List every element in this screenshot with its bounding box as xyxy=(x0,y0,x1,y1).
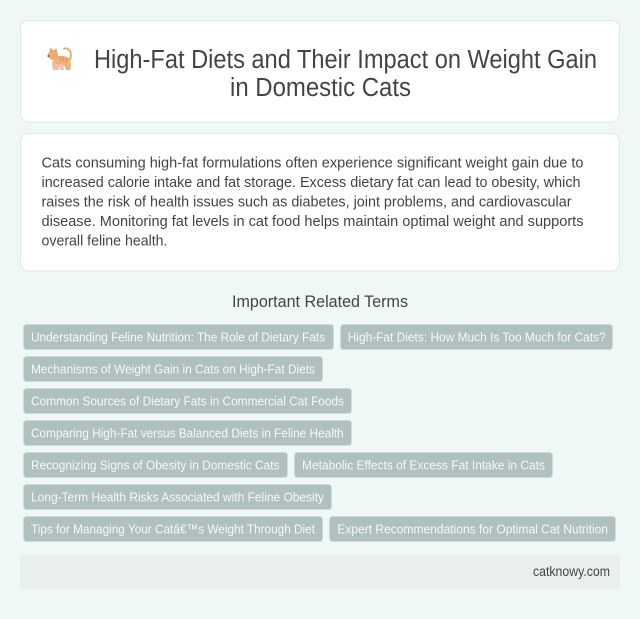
tag: Long-Term Health Risks Associated with Feline Obesity xyxy=(31,490,324,504)
tag xyxy=(294,452,552,478)
footer xyxy=(20,555,620,589)
panel: title card xyxy=(20,20,620,122)
tag: Recognizing Signs of Obesity in Domestic Cats xyxy=(31,458,280,472)
tag: Metabolic Effects of Excess Fat Intake in Cats xyxy=(302,458,545,472)
description text xyxy=(42,154,584,250)
tag xyxy=(24,324,334,350)
tag xyxy=(24,452,288,478)
tag xyxy=(330,516,616,542)
panel: description card xyxy=(20,134,620,271)
tag: Common Sources of Dietary Fats in Commercial Cat Foods xyxy=(31,394,344,408)
title text: High-Fat Diets and Their Impact on Weight Gain xyxy=(94,46,597,74)
footer site name: catknowy.com xyxy=(533,564,610,579)
icon: cat xyxy=(47,48,71,70)
tag xyxy=(24,356,322,382)
description text: raises the risk of health issues such as diabetes, joint problems, and cardiovascular xyxy=(42,194,572,210)
tag: Understanding Feline Nutrition: The Role of Dietary Fats xyxy=(31,330,325,344)
tag xyxy=(24,388,352,414)
panel: related term tags xyxy=(24,324,616,542)
description text: overall feline health. xyxy=(42,232,168,250)
description text: increased calorie intake and fat storage. Excess dietary fat can lead to obesity, which xyxy=(42,174,580,191)
title text xyxy=(94,46,597,102)
tag xyxy=(24,516,322,542)
tag xyxy=(24,484,332,510)
tag: Mechanisms of Weight Gain in Cats on High-Fat Diets xyxy=(31,362,315,376)
heading: important related terms: Important Related Terms xyxy=(232,293,408,311)
tag: Expert Recommendations for Optimal Cat Nutrition xyxy=(337,522,608,536)
tag xyxy=(24,420,352,446)
title text: in Domestic Cats xyxy=(230,74,411,102)
tag: High-Fat Diets: How Much Is Too Much for Cats? xyxy=(348,330,606,344)
description text: disease. Monitoring fat levels in cat food helps maintain optimal weight and supports xyxy=(42,213,584,230)
tag xyxy=(340,324,612,350)
description text: Cats consuming high-fat formulations often experience significant weight gain due to xyxy=(42,154,584,172)
tag: Tips for Managing Your Catâ€™s Weight Through Diet xyxy=(31,522,315,536)
tag: Comparing High-Fat versus Balanced Diets in Feline Health xyxy=(31,426,344,440)
